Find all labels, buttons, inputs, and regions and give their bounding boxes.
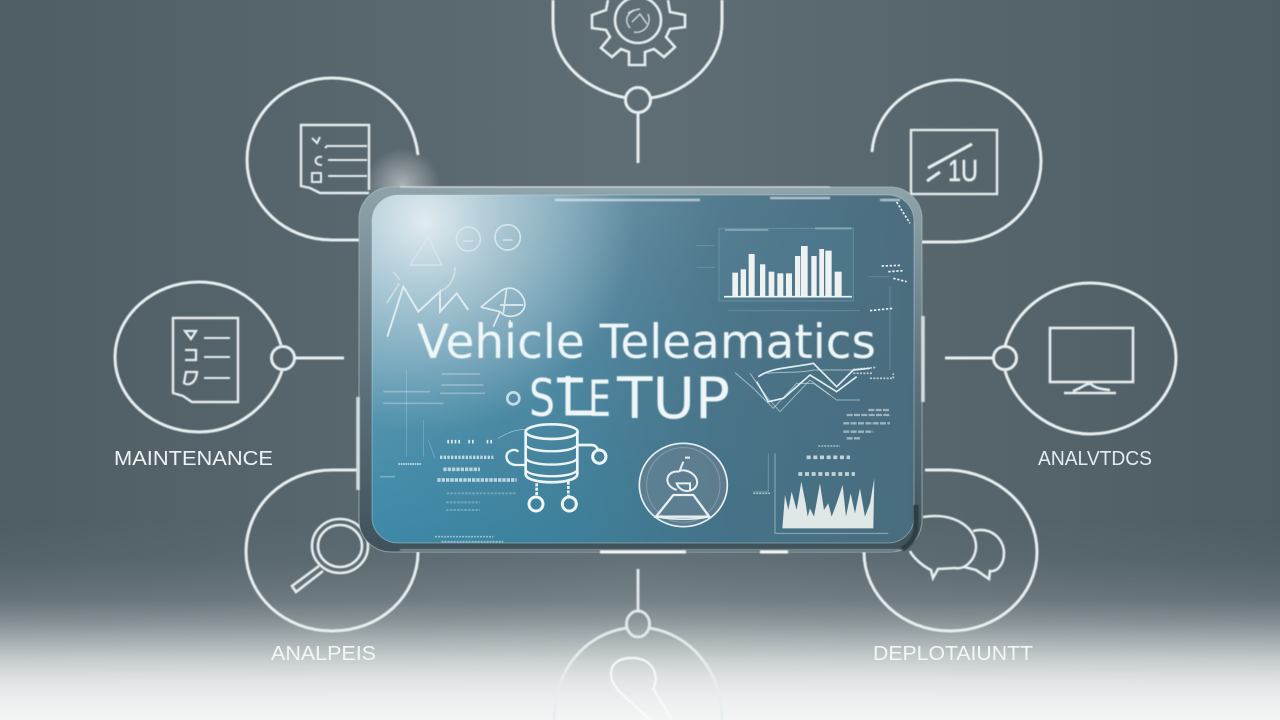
icon: trend chart: 1U <box>948 153 978 188</box>
chart: area spectrum <box>753 446 888 533</box>
label: maintenance: MAINTENANCE <box>114 448 273 470</box>
panel: tablet <box>358 187 923 552</box>
top-left sketches <box>387 225 525 337</box>
node: upper right chart <box>872 80 1041 242</box>
subtitle: TUP <box>616 366 730 432</box>
subtitle: E <box>588 370 611 428</box>
icon: bottom magnifier <box>611 658 672 720</box>
node: lower right chat <box>864 470 1037 631</box>
line wave chart <box>735 363 893 438</box>
icon: trend chart <box>911 130 997 194</box>
node: bottom magnifier <box>554 569 722 720</box>
data text texture left <box>380 370 517 542</box>
icon: chat bubbles <box>910 516 1004 579</box>
icon: round flask badge <box>639 443 727 527</box>
subtitle: S <box>529 369 555 429</box>
node: top gear <box>553 0 722 163</box>
node: upper left checklist <box>247 78 418 240</box>
icon: gear <box>592 0 685 65</box>
subtitle <box>529 366 730 432</box>
label: analytics: ANALVTDCS <box>1038 448 1152 470</box>
node: right monitor <box>945 283 1176 434</box>
icon: magnifier <box>292 519 368 592</box>
label: analysis: ANALPEIS <box>271 643 376 665</box>
icon: database <box>498 392 606 511</box>
icon: maintenance checklist <box>173 318 238 402</box>
node: left maintenance <box>115 282 344 432</box>
node: lower left magnifier <box>246 470 418 631</box>
title: Vehicle Teleamatics <box>417 315 876 370</box>
icon: monitor <box>1050 328 1133 393</box>
label: deployment: DEPLOTAIUNTT <box>873 643 1033 665</box>
tablet frame <box>359 187 922 552</box>
frame highlights <box>358 187 923 552</box>
tablet screen <box>372 195 914 543</box>
chart: bar chart <box>697 202 910 370</box>
icon: checklist <box>301 125 369 193</box>
glow above tablet <box>364 148 440 224</box>
